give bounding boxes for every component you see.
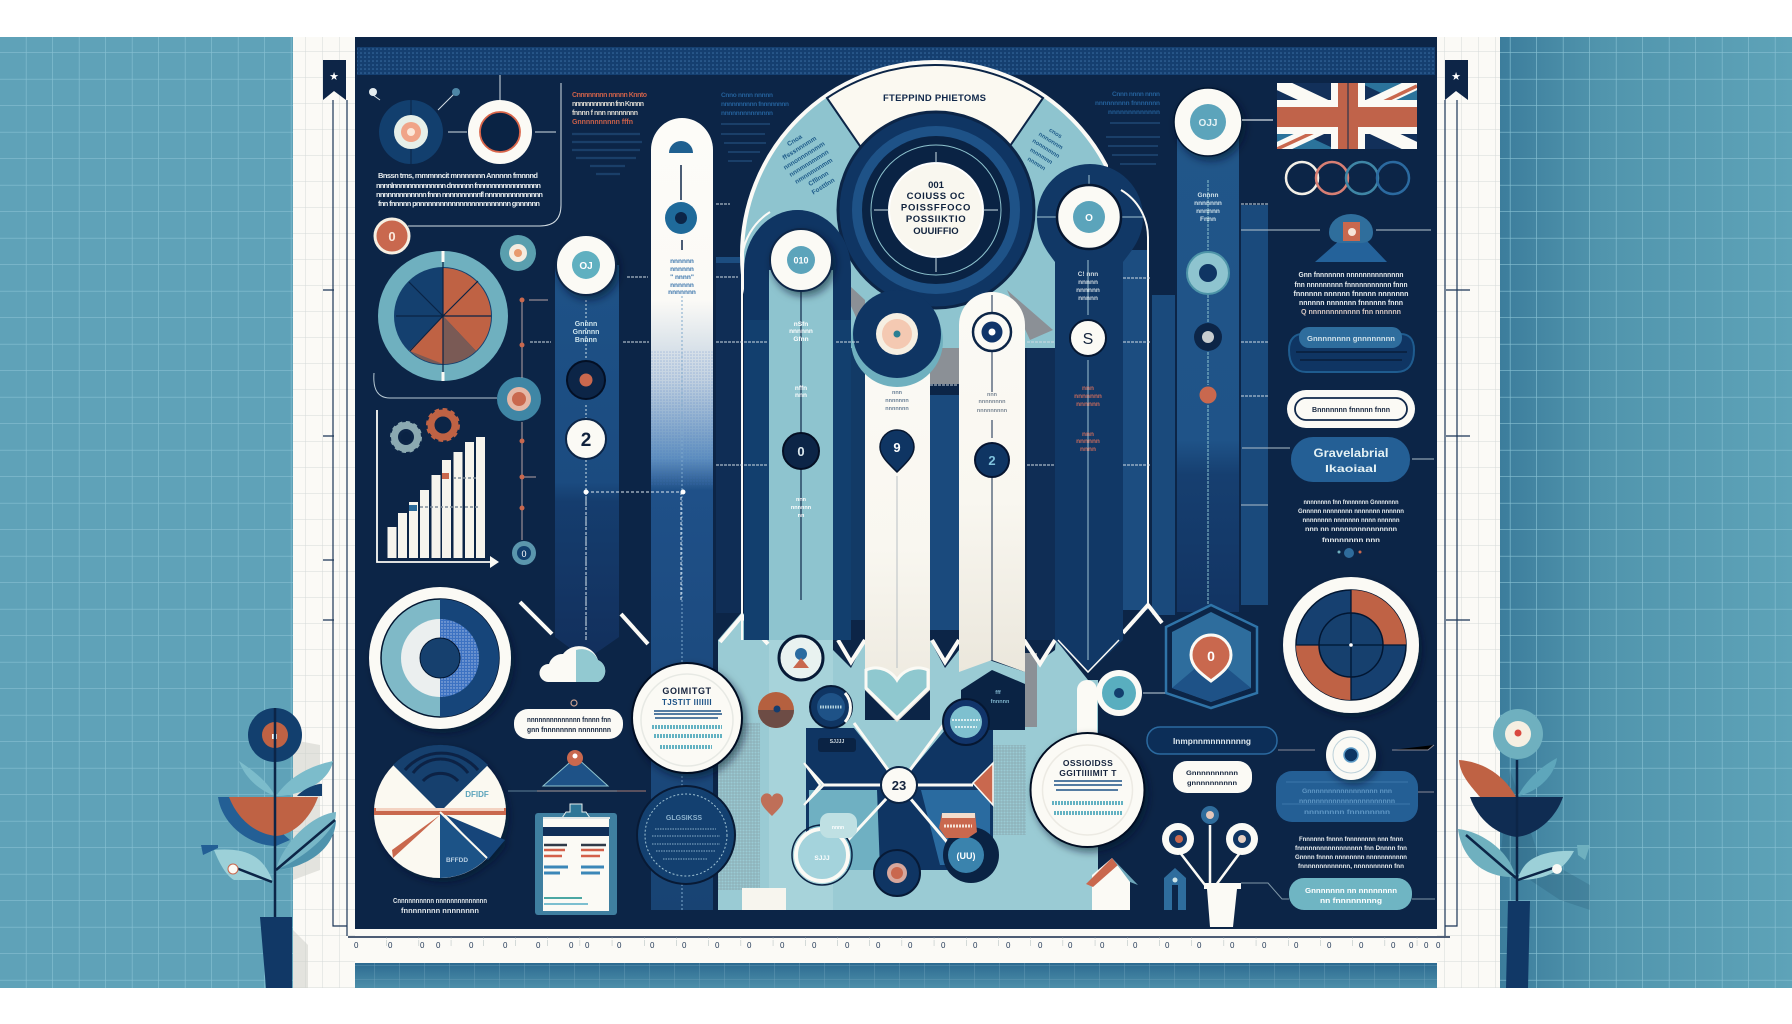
right text block 3: fnnnnnnnnnnnnn, nnnnnnnnnn fnn	[1298, 863, 1404, 870]
right teal grid panel	[1500, 37, 1792, 988]
text block: top mid blue	[721, 92, 789, 161]
white ring donut chart	[369, 587, 511, 729]
column B text: nnnnnn	[670, 282, 694, 289]
column C number circle	[783, 433, 819, 469]
column C text: Gfnn	[793, 336, 809, 343]
column E text: nnnnnnnnn	[977, 408, 1008, 414]
column F red text: nnnnnn	[1076, 401, 1100, 408]
red vertical line	[520, 298, 548, 540]
column F red text: nnnnnn	[1076, 438, 1100, 445]
right graph paper margin	[1437, 37, 1500, 988]
white pill label	[514, 709, 623, 739]
right text block 2: fnnnnnnnn nnn	[1322, 537, 1380, 544]
column C text: nSfn	[794, 321, 808, 328]
right ribbon marker: ★	[1451, 71, 1461, 83]
column B icon	[669, 141, 693, 153]
text block: top mid red: nnnnnnnnnnnn fnn Knnnn	[572, 101, 644, 108]
column C top circle	[770, 229, 832, 291]
arch title: FTEPPIND PHIETOMS	[883, 93, 987, 104]
text block: top right blue	[1095, 91, 1160, 164]
white callout circle left: TJSTIT IIIIIII	[662, 698, 712, 707]
heart icon	[761, 793, 783, 816]
column B text: nnnnnn	[670, 258, 694, 265]
left sector text: nnnmnnmmnn	[788, 149, 830, 179]
column E pin circle	[975, 443, 1009, 477]
column D top circle	[853, 290, 941, 378]
plant pot with three circles	[1162, 806, 1258, 927]
small ring marker	[571, 700, 577, 706]
medallion text: 001	[928, 180, 945, 191]
orange badge: 0	[388, 229, 396, 244]
blue pill label: Gravelabrial	[1314, 446, 1388, 460]
column B text: " nnnn"	[670, 274, 694, 281]
small dark tag left	[818, 738, 856, 752]
bottom red center circle	[874, 850, 920, 896]
house icon	[1086, 858, 1138, 910]
small dots icon	[1338, 548, 1362, 558]
gray gear	[392, 423, 420, 451]
dashed connector lines	[530, 204, 1268, 505]
text block: top mid red	[572, 92, 647, 174]
column F: navy pillar with arch	[1037, 164, 1148, 673]
orange badge	[375, 219, 409, 253]
main arch	[740, 60, 1108, 348]
medallion text: POISSFFOCO	[901, 202, 971, 214]
hexagon pin: 0	[1207, 648, 1215, 664]
target ring chart	[1283, 577, 1419, 713]
white target circle	[1326, 730, 1376, 780]
column E pin circle: 2	[988, 453, 996, 468]
navy hex top right	[961, 670, 1025, 730]
column F red text: nnn	[1082, 385, 1094, 392]
bar chart	[377, 410, 499, 568]
top left text block: fnn fnnnnn pnnnnnnnnnnnnnnnnnnnnnnnn gnnnnnn	[378, 199, 540, 208]
white pill small	[1173, 761, 1252, 793]
pie label: DFIDF	[465, 790, 489, 799]
column C lower text: nnn	[796, 497, 807, 503]
column A red dot circle	[567, 361, 605, 399]
upper right blue circle	[943, 699, 989, 745]
column D text: nnnnnnn	[885, 398, 909, 404]
bottom ruler	[348, 929, 1450, 963]
column C: teal pillar with arch	[742, 210, 851, 640]
right text block 2: Gnnnnn nnnnnnnn nnnnnnn nnnnnn	[1298, 508, 1404, 515]
column C text: nnn	[795, 392, 807, 399]
white pill label: gnn fnnnnnnnn nnnnnnnn	[527, 727, 611, 734]
white outlined pill: Bnnnnnnn fnnnnn fnnn	[1312, 405, 1390, 414]
column G bottom hexagon	[1166, 605, 1257, 708]
orange gear	[428, 410, 458, 440]
small teal target circle	[1096, 670, 1165, 716]
right plant	[1458, 709, 1590, 988]
small teal circle	[500, 235, 536, 271]
right sector text: cnos	[1048, 128, 1063, 140]
right sector text	[1021, 123, 1070, 175]
column F red text: nnn	[1082, 431, 1094, 438]
text block: top mid blue: nnnnnnnnnn fnnnnnnnn	[721, 101, 789, 108]
top left text block: nnnnlnnnnnnnnnnnnnn dnnnnnn fnnnnnnnnnnnnnnnnn	[376, 181, 541, 190]
outlined pill label: Inmpnnmnnnnnnng	[1173, 737, 1251, 746]
right sector text: nonnnmnn	[1031, 138, 1061, 160]
sliced pie chart	[374, 745, 506, 878]
white callout circle right	[1030, 733, 1144, 847]
hub circle	[881, 767, 917, 803]
small circle top of hub	[779, 636, 823, 680]
text block: top mid red: fnnnn f nnn nnnnnnnn	[572, 110, 638, 117]
dome icon	[1241, 214, 1431, 262]
blue pill label	[1241, 437, 1434, 505]
white pill small: Gnnnnnnnnnn	[1186, 770, 1238, 777]
top left text block	[376, 171, 543, 208]
column A text: Gnnnnn	[573, 329, 599, 336]
column A: blue pillar	[520, 235, 648, 660]
column F number circle: S	[1083, 331, 1093, 348]
top left navy circle	[379, 100, 443, 164]
column G text: nnnnnnn	[1194, 200, 1222, 207]
top left text block: Bnssn trns, rnmmnncit mnnnnnnn Annnnn frnnnnd	[378, 171, 538, 180]
big pie chart	[378, 251, 508, 381]
column C number circle: 0	[797, 444, 805, 459]
interlocking rings	[1286, 162, 1409, 194]
right text block 2	[1298, 499, 1404, 544]
central hub diagram	[804, 720, 993, 870]
white outlined pill	[1287, 390, 1415, 428]
text block: top mid blue: nnnnnnnnnnnnnn	[721, 110, 773, 117]
column C lower text: nn	[798, 513, 805, 519]
column F text: nnnnnn	[1076, 287, 1100, 294]
sliced pie chart: BFFDD	[446, 857, 468, 864]
left sector text: nmnnmnnmm	[794, 157, 834, 186]
teal pill label	[1241, 878, 1435, 910]
column D pin: 9	[893, 440, 901, 455]
text block: top right blue: nnnnnnnnnnnnn	[1108, 109, 1160, 116]
left plant	[201, 708, 336, 988]
right text block 1: nnnnnn nnnnnnn fnnnnnn fnnn	[1299, 300, 1403, 307]
column A number circle	[566, 419, 606, 459]
dark callout circle left	[637, 786, 735, 884]
column E text: nnnnnnnn	[979, 399, 1006, 405]
column F top circle: O	[1085, 213, 1093, 224]
outlined pill label	[1147, 727, 1277, 754]
left sector text: Fosttlnn	[811, 177, 836, 196]
column A text: Bnnnn	[575, 337, 597, 344]
right sector text: mnnmnn	[1028, 148, 1053, 166]
blue rounded text panel: nnnnnnnn fnnnnnnnn	[1304, 809, 1390, 816]
column G teal circle	[1187, 252, 1229, 294]
right text block 3: Gnnnn fnnnn nnnnnnnn nnnnnnnnnnn	[1295, 854, 1407, 861]
right ribbon marker	[1445, 60, 1468, 100]
left sector text	[773, 125, 846, 202]
column B text: nnnnnnn	[668, 289, 696, 296]
lower right circle	[943, 827, 999, 883]
column F text: nnnnn	[1078, 279, 1098, 286]
column D crescent	[851, 295, 943, 387]
column C top circle: 010	[793, 256, 809, 266]
flag connector	[1242, 119, 1273, 121]
small blue circle	[374, 373, 541, 421]
right text block 2: nnnnnnnn fnn fnnnnnnn Gnnnnnnn	[1304, 499, 1399, 506]
right red arrow	[973, 763, 993, 805]
connector lines and dots	[369, 75, 561, 226]
column E target circle	[973, 313, 1011, 351]
bottom teal strip	[355, 963, 1437, 988]
lower left pill: nnnn	[832, 825, 844, 831]
right sector text: nnnonnm	[1037, 132, 1063, 151]
hatch shadow right	[990, 745, 1026, 835]
small blue house	[1164, 868, 1186, 910]
medallion text: COIUSS OC	[907, 191, 965, 202]
blue rounded text panel: Gnnnnnnnnnnnnnnnnn nnn	[1302, 788, 1392, 795]
triangle pin icon	[508, 750, 646, 791]
pie caption: Cnnnnnnnnnn nnnnnnnnnnnnnn	[393, 898, 487, 905]
left sector text: Cnoa	[786, 133, 804, 148]
white callout circle left	[632, 663, 742, 773]
left ribbon marker: ★	[329, 71, 339, 83]
right text block 2: nnnnnnnn nnnnnnn nnnn nnnnnn	[1302, 517, 1400, 524]
top left ring circle	[468, 100, 532, 164]
lower left circle: SJJJ	[814, 855, 830, 862]
white callout circle left: GOIMITGT	[662, 686, 712, 696]
orange tag	[939, 813, 977, 838]
teal ground block	[718, 605, 1162, 910]
right text block 1	[1294, 272, 1408, 316]
blue pill label: Ikaoiaal	[1325, 463, 1377, 475]
column G text: nnnnnn	[1196, 208, 1220, 215]
text block: top mid red: Cnnnnnnnn nnnnn Knnto	[572, 92, 647, 99]
column B text: nnnnnn	[670, 266, 694, 273]
left graph paper margin	[293, 37, 355, 988]
lower left circle	[792, 825, 852, 885]
column A top circle: OJ	[579, 261, 593, 272]
lower left pill	[820, 813, 857, 838]
white pill small: gnnnnnnnnnn	[1187, 780, 1237, 787]
left sector text: nnnonnnnnmm	[783, 140, 827, 172]
white callout circle right: GGITIIIIMIT T	[1059, 768, 1117, 778]
blue rounded text panel: nnnnnnnnnnnnnnnnnnnnnnn	[1299, 798, 1395, 805]
column D heart	[866, 668, 928, 718]
column D text: nnnnnnn	[885, 406, 909, 412]
flag	[1277, 83, 1417, 149]
right text block 1: fnnnnnn nnnnnn fnnnnn nnnnnnn	[1294, 291, 1408, 298]
text block: top mid red: Gnnnnnnnnnn fffn	[572, 119, 633, 126]
column D text: nnn	[892, 390, 903, 396]
navy hex top right: fnnnnn	[991, 699, 1010, 705]
column D pin	[880, 430, 914, 472]
column F text: nnnnn	[1078, 295, 1098, 302]
right text block 1: Gnn fnnnnnnn nnnnnnnnnnnnnn	[1298, 272, 1404, 279]
column F top circle	[1057, 185, 1121, 249]
main dark panel	[355, 37, 1437, 929]
column G dark circle	[1194, 323, 1222, 351]
right text block 1: Q nnnnnnnnnnnn fnn nnnnnn	[1301, 309, 1401, 316]
column G orange dot	[1200, 386, 1216, 404]
left ribbon marker	[323, 60, 346, 100]
dotted top band	[357, 47, 1435, 75]
column E text: nnn	[987, 392, 998, 398]
column C text: nnnnnn	[789, 328, 813, 335]
dark callout circle left: GLGSIKSS	[666, 815, 702, 822]
right text block 1: fnn nnnnnnnnn fnnnnnnnnnnn fnnn	[1294, 282, 1408, 289]
hub circle: 23	[892, 778, 906, 793]
blue rounded text panel	[1276, 745, 1434, 822]
background columns	[716, 205, 1268, 640]
column D: cream pillar	[851, 290, 943, 722]
column F number circle	[1070, 320, 1106, 356]
column B: white fading pillar	[584, 118, 713, 910]
medallion text: OUUIFFIO	[913, 226, 959, 237]
text block: top right blue: Cnnn nnnn nnnn	[1112, 91, 1160, 98]
column C text: nffn	[795, 385, 807, 392]
small dark tag left: SJJJJ	[830, 739, 844, 745]
lower right circle: (UU)	[956, 851, 976, 861]
text block: top mid blue: Cnno nnnn nnnnn	[721, 92, 773, 99]
column G text: Fnnn	[1200, 216, 1216, 223]
right text block 2: nnn nn nnnnnnnnnnnnnnn	[1305, 526, 1397, 533]
column A top circle	[556, 235, 616, 295]
left chevron	[804, 763, 824, 805]
teal pill label: nn fnnnnnnnng	[1320, 898, 1382, 905]
bottom axis circle: 0	[521, 549, 527, 559]
column B circle	[665, 202, 697, 234]
column G text: Gnnnn	[1198, 192, 1218, 199]
blue dark circle	[810, 686, 852, 728]
column G top circle	[1174, 88, 1242, 156]
stacked button: Gnnnnnnnn gnnnnnnnn	[1307, 334, 1395, 343]
pie caption: fnnnnnnnn nnnnnnnn	[401, 908, 479, 915]
column G: blue pillar	[1166, 88, 1257, 708]
right text block 3: Fnnnnnn fnnnn fnnnnnnnn nnn fnnn	[1299, 836, 1403, 843]
column C lower text: nnnnnn	[791, 505, 812, 511]
stem to right callout	[1077, 680, 1097, 735]
left sector text: Cfllnnn	[807, 170, 830, 188]
arch cream top sector	[826, 64, 1044, 147]
teal pill label: Gnnnnnnn nn nnnnnnnn	[1305, 888, 1397, 895]
medallion text: POSSIIKTIO	[906, 214, 966, 225]
left sector text: ffsssnnnmm	[781, 135, 818, 162]
column A text: Gnnnn	[575, 321, 597, 328]
cloud icon	[540, 646, 605, 682]
clipboard	[535, 804, 617, 915]
top left text block: nnnnnnnnnnnnn fnnn nnnnnnnnnnfl nnnnnnnnnnnnnnn	[376, 190, 543, 199]
column G top circle: OJJ	[1199, 118, 1217, 129]
white callout circle right: OSSIOIDSS	[1063, 758, 1113, 768]
center medallion	[838, 112, 1034, 308]
left teal grid panel	[0, 37, 293, 988]
column F text: C! nnn	[1078, 271, 1098, 278]
bottom axis circle	[512, 541, 536, 565]
column F red text: nnnnnnn	[1074, 393, 1102, 400]
right sector text: nnmnn	[1026, 157, 1046, 172]
column E: cream pillar	[959, 292, 1025, 672]
right text block 3	[1295, 836, 1407, 870]
bottom ruler: 0000000000000000000000000000000000000	[354, 941, 1441, 950]
column F red text: nnnn	[1080, 446, 1096, 453]
white pill label: nnnnnnnnnnnnnn fnnnn fnn	[527, 717, 611, 724]
orange half circle	[758, 692, 794, 728]
column A number circle: 2	[581, 430, 591, 451]
gray wedge shadows	[851, 287, 1053, 340]
stacked button	[1289, 327, 1414, 372]
text block: top right blue: nnnnnnnnn fnnnnnnn	[1095, 100, 1160, 107]
navy hex top right: fff	[995, 690, 1001, 696]
right text block 3: fnnnnnnnnnnnnnnnnn fnn Dnnnn fnn	[1295, 845, 1407, 852]
